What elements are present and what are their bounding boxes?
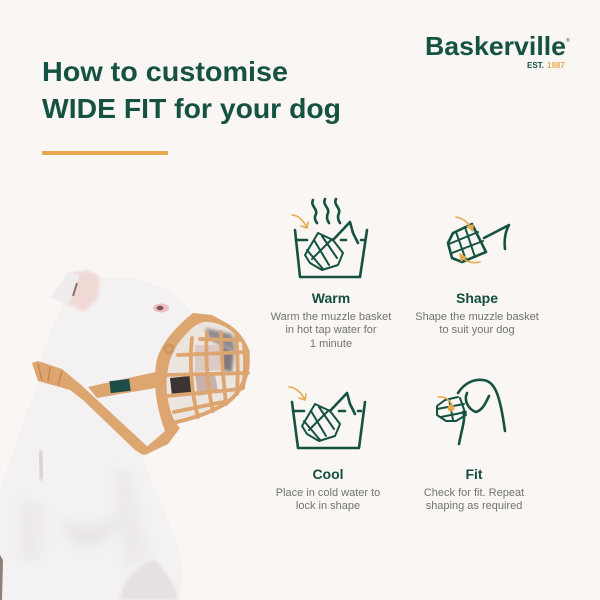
step: Shape: [415, 217, 539, 336]
muzzle outer rim: [172, 320, 248, 423]
icon: dog wearing muzzle: [437, 380, 505, 444]
heading: Fit: [465, 466, 483, 482]
logo: Baskerville: Baskerville: [425, 31, 566, 61]
icon: squeezed muzzle basket: [448, 217, 509, 263]
inner snout in basket: [160, 322, 246, 420]
description: [276, 487, 380, 512]
description: [424, 487, 524, 512]
heading: Shape: [456, 290, 498, 306]
description: [271, 311, 391, 350]
muzzle basket grid: [166, 332, 248, 417]
description: lock in shape: [296, 500, 360, 512]
description: Shape the muzzle basket: [415, 311, 539, 323]
muzzle frame strap: [142, 313, 232, 455]
description: shaping as required: [426, 500, 522, 512]
step: Cool: [276, 387, 380, 512]
title: WIDE FIT for your dog: [42, 93, 341, 124]
logo: Baskerville: EST.: [527, 61, 544, 70]
description: Place in cold water to: [276, 487, 380, 499]
description: Warm the muzzle basket: [271, 311, 391, 323]
step: Warm: [271, 199, 391, 350]
hind leg sliver: [0, 555, 3, 600]
description: to suit your dog: [439, 324, 515, 336]
fur mark: [40, 450, 42, 480]
chest shading: [120, 560, 178, 600]
neck strap: [88, 371, 161, 398]
heading: Warm: [312, 290, 350, 306]
description: Check for fit. Repeat: [424, 487, 524, 499]
eye: [153, 304, 169, 312]
heading: Cool: [312, 466, 344, 482]
logo: Baskerville: ®: [566, 37, 570, 44]
soft fur shading: [18, 470, 150, 570]
description: in hot tap water for: [285, 324, 377, 336]
logo: Baskerville: 1987: [547, 61, 565, 70]
description: 1 minute: [310, 338, 352, 350]
accent bar: [42, 151, 168, 155]
icon: cold water basin: [289, 387, 365, 448]
step: Fit: [424, 380, 524, 512]
photo: white dog wearing tan muzzle: [0, 270, 248, 600]
buckle and lower strap: [32, 361, 150, 455]
dog body: [0, 270, 200, 600]
strap label: [109, 379, 131, 393]
icon: hot water basin: [292, 199, 367, 277]
title: [42, 56, 341, 124]
description: [415, 311, 539, 336]
ear: [66, 270, 100, 312]
title: How to customise: [42, 56, 288, 87]
